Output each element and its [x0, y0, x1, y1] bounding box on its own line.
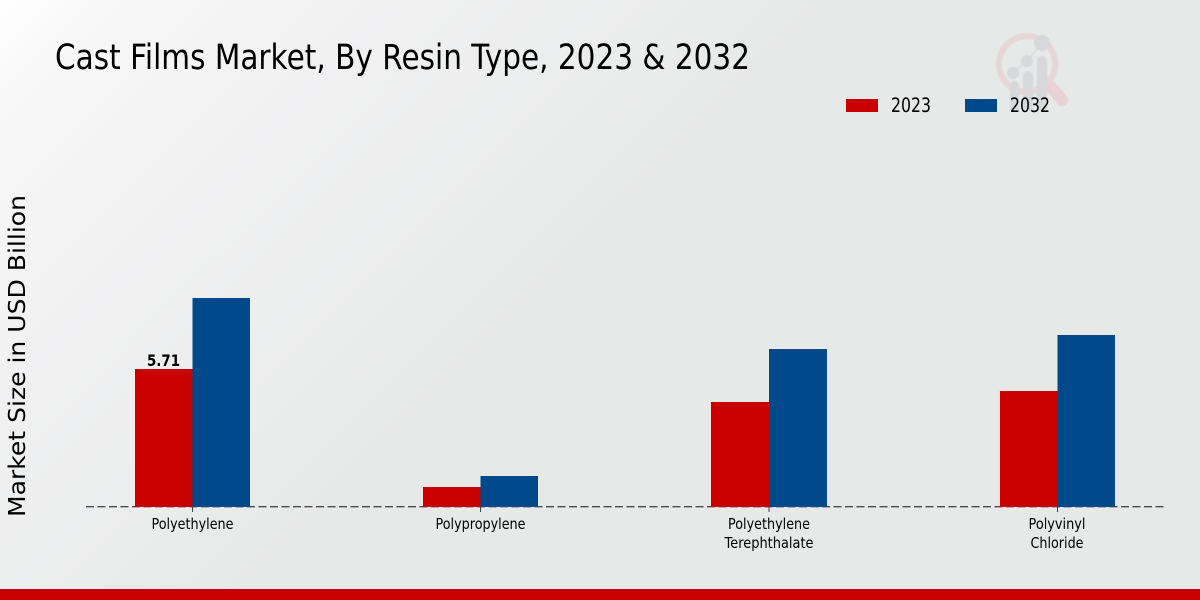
legend item: 2023: 2023 [891, 94, 931, 117]
category label: Polyethylene Terephthalate: Terephthalate [724, 534, 814, 552]
bars: Polypropylene [423, 476, 538, 507]
category label: Polyvinyl Chloride: Polyvinyl [1028, 515, 1086, 533]
axis ticks [192, 507, 1058, 512]
title: Cast Films Market, By Resin Type, 2023 & 2032 [55, 38, 750, 78]
legend item: 2032: 2032 [1010, 94, 1050, 117]
icon: watermark logo [999, 35, 1062, 110]
category label: Polyvinyl Chloride: Chloride [1030, 534, 1084, 552]
category label: Polypropylene: Polypropylene [436, 515, 526, 533]
category label: Polyethylene: Polyethylene [152, 515, 234, 533]
bars: Polyvinyl Chloride [1000, 335, 1115, 507]
bars: Polyethylene [135, 298, 250, 507]
footer bar [0, 589, 1200, 600]
category label: Polyethylene Terephthalate: Polyethylene [728, 515, 810, 533]
value label: 5.71: 5.71 [147, 351, 180, 370]
legend item: 2032 [965, 94, 1050, 117]
bars: Polyethylene Terephthalate [711, 349, 827, 507]
bar chart [86, 298, 1165, 512]
y axis title: Market Size in USD Billion [5, 195, 31, 517]
legend [846, 94, 1050, 117]
legend item: 2023 [846, 94, 931, 117]
x axis baseline [86, 506, 1165, 508]
category label: Polyvinyl Chloride [1028, 515, 1086, 552]
category label: Polyethylene Terephthalate [724, 515, 814, 552]
